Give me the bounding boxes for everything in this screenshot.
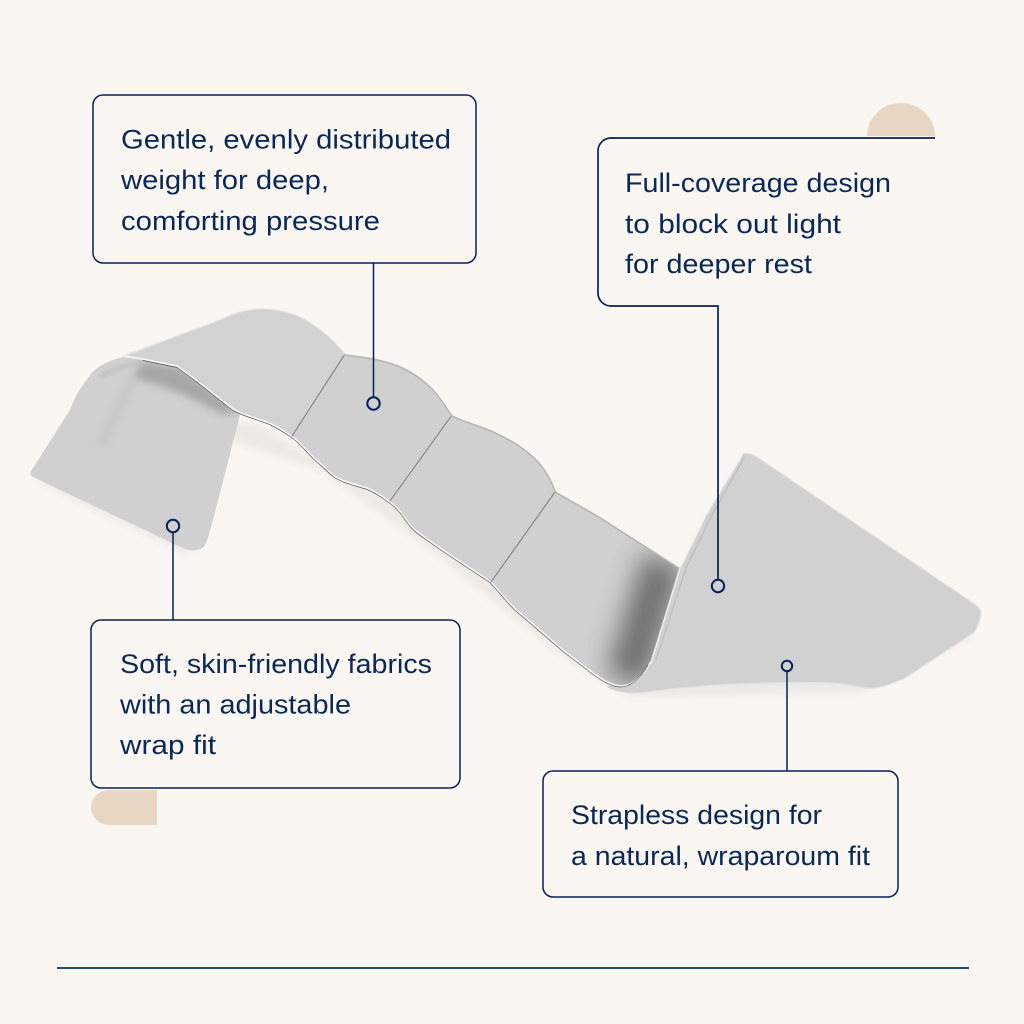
callout box [91,620,460,788]
callout text: Strapless design for [571,800,822,830]
open callout frame with leader line [598,138,935,579]
wrap: stitched seams [123,309,981,693]
callout text: to block out light [625,209,842,239]
callout text: for deeper rest [625,249,813,279]
callout box [543,771,898,897]
callout text [120,124,451,236]
callout box [93,95,476,263]
callout text: wrap fit [119,730,217,760]
wrap: folded upper section [123,309,345,436]
decorative beige pill bottom left [91,790,157,825]
callout text: with an adjustable [119,690,351,720]
wrap: right triangular flap [607,453,981,693]
product illustration: weighted wrap [31,309,981,698]
callout text [119,649,432,760]
callout text: weight for deep, [120,165,329,195]
callout: soft fabrics [91,520,460,788]
callout text: a natural, wraparoum fit [571,841,871,871]
callout: even weight [93,95,476,410]
wrap: shadow at right fold [626,560,664,680]
callout text: comforting pressure [121,206,380,236]
callout: strapless design [543,661,898,897]
marker [712,580,724,592]
callout: full coverage [598,138,935,592]
wrap: left hanging flap [31,357,240,550]
wrap: shading under fold [102,360,236,417]
leader line and marker [367,263,380,410]
callout text: Gentle, evenly distributed [121,124,451,154]
bottom rule [57,967,969,969]
callout text [571,800,871,871]
leader line and marker [167,520,179,620]
callout text: Soft, skin-friendly fabrics [120,649,432,679]
callout text: Full-coverage design [625,168,891,198]
callout text [625,168,891,279]
decorative beige semicircle top right [867,103,935,136]
leader line and marker [782,661,792,771]
wrap: padded centre band [290,354,680,686]
